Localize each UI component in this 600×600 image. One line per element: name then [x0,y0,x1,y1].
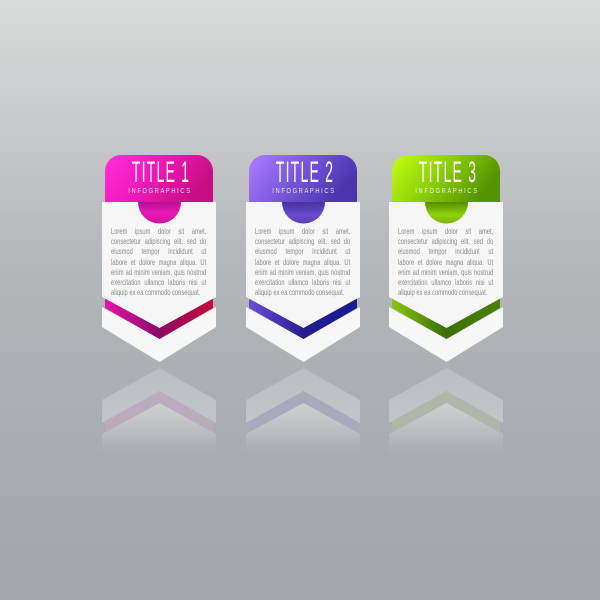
text block: description: Lorem ipsum dolor sit amet, [398,226,493,236]
text block: description: eiusmod tempor incididunt ut [255,246,350,256]
subheading: infographics: INFOGRAPHICS [272,188,336,195]
text block: description: exercitation ullamco laboris nisi ut [398,277,493,287]
text block: description: enim ad minim veniam, quis nostrud [398,267,493,277]
panel: card 1 [102,155,216,442]
text block: description: aliquip ex ea commodo consequat. [398,287,487,297]
panel: card 3 [389,155,503,442]
heading: title 1: TITLE 1 [132,156,190,189]
card 3 graphic: tab, paper and ribbon [389,155,503,442]
text block: description: labore et dolore magna aliqua. Ut [255,257,350,267]
text block: description: aliquip ex ea commodo consequat. [111,287,200,297]
text block: description: labore et dolore magna aliqua. Ut [398,257,493,267]
card 1 graphic: tab, paper and ribbon [102,155,216,442]
text block: description: eiusmod tempor incididunt ut [111,246,206,256]
text block: description: exercitation ullamco laboris nisi ut [255,277,350,287]
text block: description: consectetur adipiscing elit, sed do [255,236,350,246]
heading: title 2: TITLE 2 [276,156,334,189]
text block: description: enim ad minim veniam, quis nostrud [111,267,206,277]
text block: description: exercitation ullamco laboris nisi ut [111,277,206,287]
text block: description: consectetur adipiscing elit, sed do [398,236,493,246]
text block: description: enim ad minim veniam, quis nostrud [255,267,350,277]
text block: description: consectetur adipiscing elit, sed do [111,236,206,246]
text block: description: aliquip ex ea commodo consequat. [255,287,344,297]
subheading: infographics: INFOGRAPHICS [415,188,479,195]
text block: description: labore et dolore magna aliqua. Ut [111,257,206,267]
text block: description: Lorem ipsum dolor sit amet, [111,226,206,236]
heading: title 3: TITLE 3 [419,156,477,189]
text block: description [255,226,350,297]
subheading: infographics: INFOGRAPHICS [128,188,192,195]
card 2 graphic: tab, paper and ribbon [246,155,360,442]
text block: description: eiusmod tempor incididunt ut [398,246,493,256]
text block: description [111,226,206,297]
text block: description: Lorem ipsum dolor sit amet, [255,226,350,236]
panel: card 2 [246,155,360,442]
text block: description [398,226,494,297]
